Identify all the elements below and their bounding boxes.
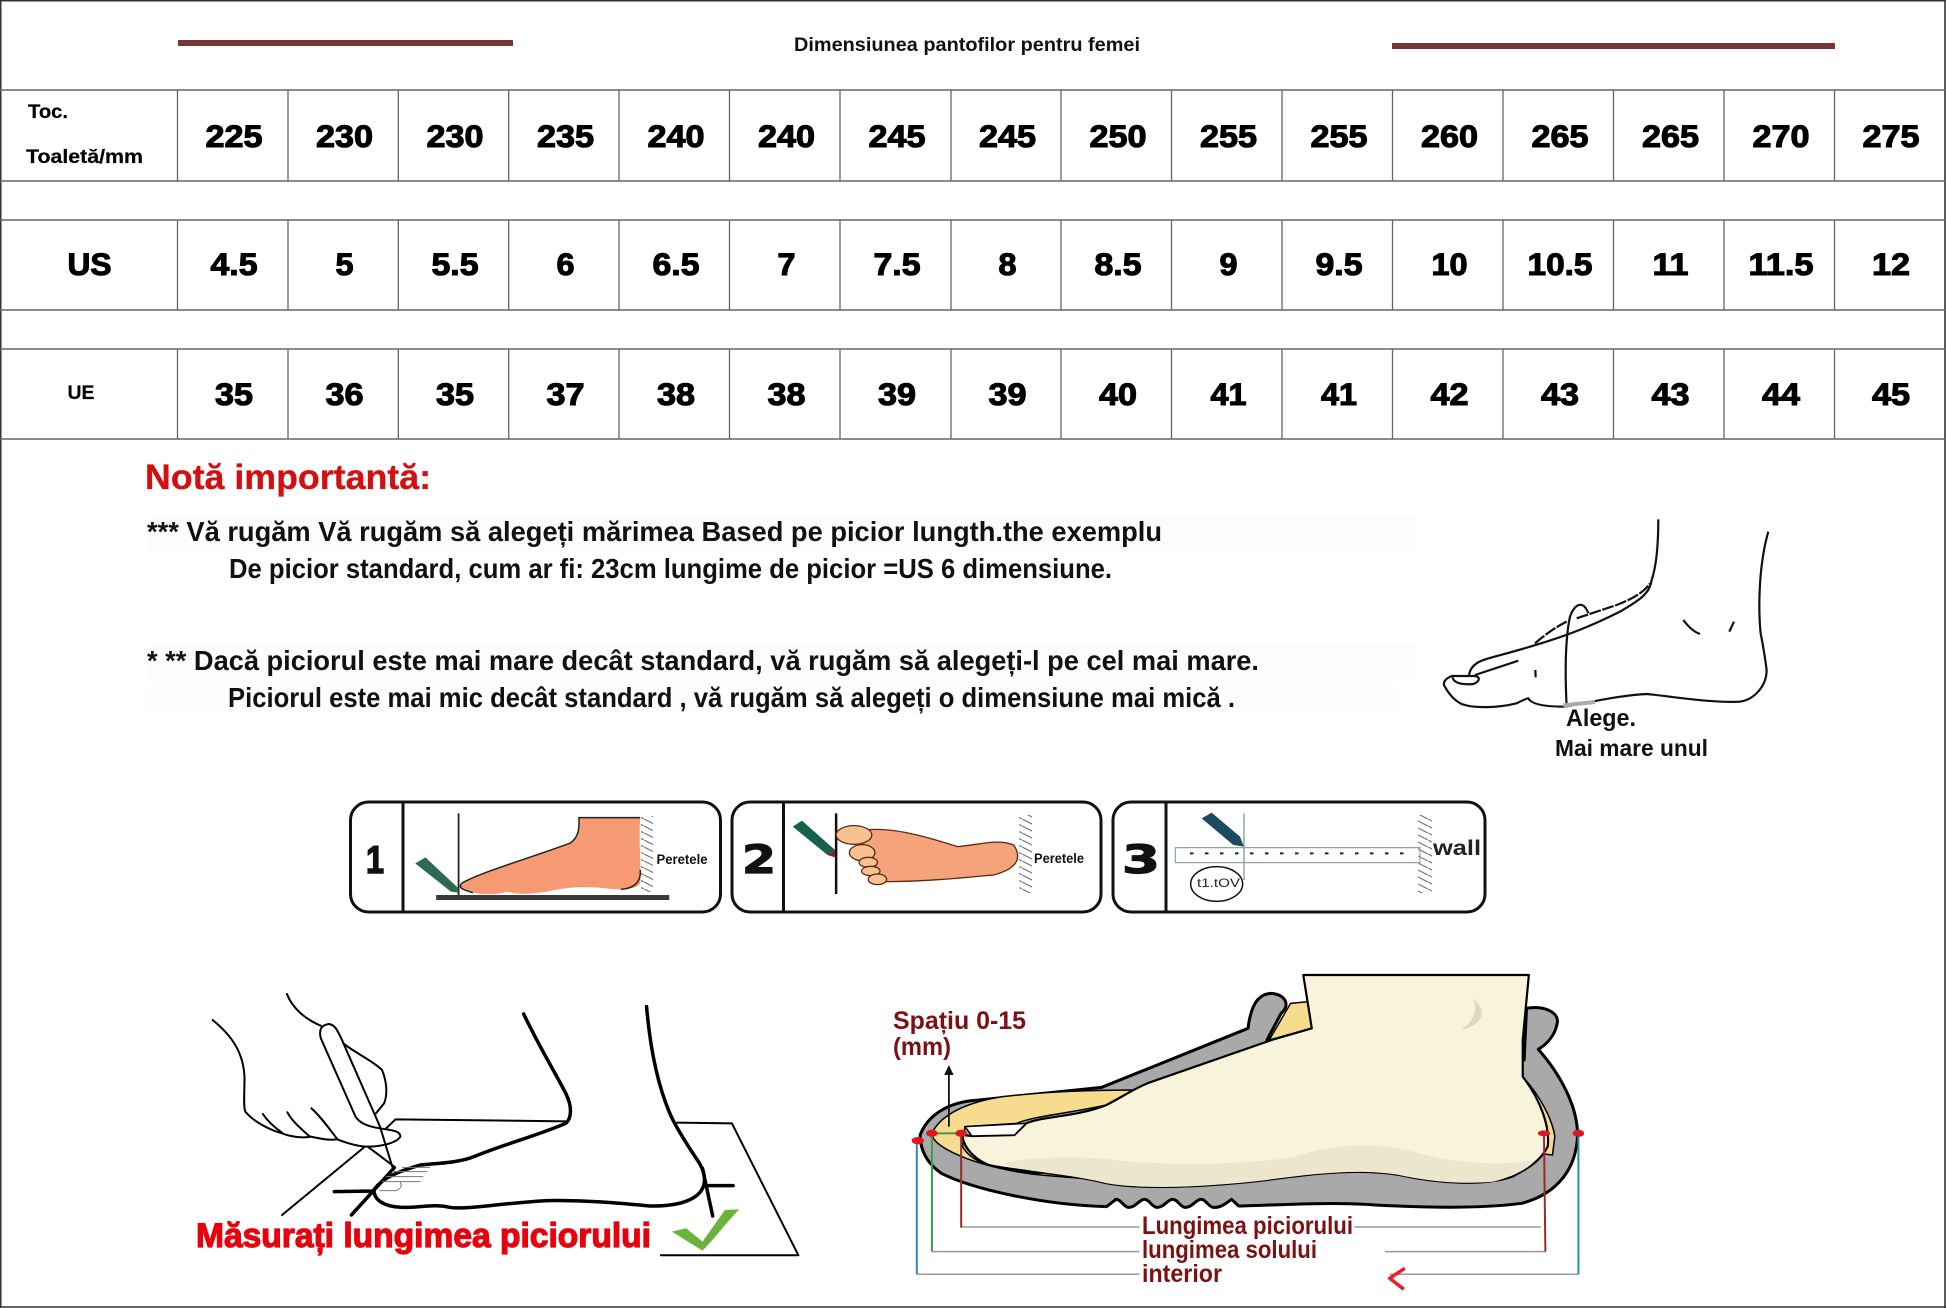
row: foot length in mm: 275 <box>1862 118 1920 154</box>
step 1 panel: 1 <box>366 839 384 882</box>
shoe cross-section diagram: (mm) <box>893 1033 951 1061</box>
title bar <box>178 35 1835 56</box>
row: US sizes: 8 <box>998 246 1016 282</box>
row: US sizes: 9.5 <box>1316 246 1362 282</box>
step 1 panel <box>350 802 720 912</box>
row: EU sizes: 35 <box>436 376 474 412</box>
illustration: measuring foot length with pen <box>196 994 798 1255</box>
row: EU sizes <box>68 376 1910 412</box>
row: US sizes: 5.5 <box>432 246 478 282</box>
row: US sizes <box>68 246 1910 282</box>
row: EU sizes: 38 <box>768 376 806 412</box>
row: US sizes: 7.5 <box>874 246 920 282</box>
row: US sizes: 11 <box>1652 246 1688 282</box>
row: US sizes: 10 <box>1432 246 1468 282</box>
foot side view with pen <box>415 813 669 900</box>
row: US sizes: 8.5 <box>1094 246 1142 282</box>
row: foot length in mm: 260 <box>1421 118 1478 154</box>
step 3 panel <box>1113 802 1485 912</box>
row: foot length in mm: 230 <box>316 118 373 154</box>
row: US sizes: 10.5 <box>1528 246 1592 282</box>
gap label: Spațiu 0-15 <box>893 1007 1026 1035</box>
foot top view with pen <box>793 813 1018 894</box>
row: EU sizes: 41 <box>1321 376 1357 412</box>
row: foot length in mm: 240 <box>758 118 815 154</box>
row: EU sizes: 38 <box>657 376 695 412</box>
row: EU sizes: 40 <box>1099 376 1137 412</box>
row: foot length in mm: 245 <box>979 118 1036 154</box>
row: EU sizes: 37 <box>546 376 584 412</box>
row: EU sizes: 43 <box>1541 376 1579 412</box>
length labels: Lungimea piciorului <box>1142 1212 1353 1240</box>
row: foot length in mm: 255 <box>1310 118 1368 154</box>
row: EU sizes: UE <box>68 383 94 404</box>
row: foot length in mm <box>26 102 1920 168</box>
row: EU sizes: 41 <box>1210 376 1246 412</box>
row: foot length in mm: Toc. <box>28 102 68 123</box>
wall hatch <box>1418 815 1432 893</box>
foot sketch: choose larger size <box>1444 519 1768 761</box>
row: EU sizes: 42 <box>1430 376 1468 412</box>
row: US sizes: 6 <box>556 246 574 282</box>
row: US sizes: 6.5 <box>652 246 700 282</box>
row: US sizes: 4.5 <box>210 246 258 282</box>
row: foot length in mm: 225 <box>206 118 262 154</box>
row: foot length in mm: 270 <box>1752 118 1810 154</box>
row: foot length in mm: 250 <box>1090 118 1146 154</box>
row: foot length in mm: Toaletă/mm <box>26 147 143 168</box>
row: foot length in mm: 265 <box>1642 118 1699 154</box>
title: Dimensiunea pantofilor pentru femei <box>794 35 1140 56</box>
yellow insole <box>932 1090 1135 1180</box>
wall hatch <box>1019 815 1032 893</box>
row: US sizes: US <box>68 246 112 282</box>
shoe cross-section diagram: interior <box>1142 1260 1222 1288</box>
row: foot length in mm: 255 <box>1200 118 1257 154</box>
row: US sizes: 12 <box>1872 246 1910 282</box>
green check mark <box>672 1209 739 1251</box>
row: foot length in mm: 265 <box>1532 118 1588 154</box>
row: EU sizes: 35 <box>215 376 253 412</box>
measurement lines <box>917 1227 1578 1274</box>
clearance arrow <box>948 1073 950 1127</box>
wall hatch <box>641 816 653 892</box>
step 3 panel: 3 <box>1122 838 1160 883</box>
row: EU sizes: 44 <box>1762 376 1801 412</box>
note heading: Notă importantă: <box>145 458 431 497</box>
step 2 panel: 2 <box>742 838 776 883</box>
row: EU sizes: 36 <box>326 376 364 412</box>
important note text block: De picior standard, cum ar fi: 23cm lungime de picior =US 6 dimensiune. <box>229 553 1112 584</box>
row: US sizes: 9 <box>1220 246 1238 282</box>
important note text block: * ** Dacă piciorul este mai mare decât standard, vă rugăm să alegeți-l pe cel mai mare. <box>147 645 1259 676</box>
row: US sizes: 7 <box>778 246 796 282</box>
row: foot length in mm: 240 <box>648 118 704 154</box>
shoe cross-section diagram <box>893 975 1584 1289</box>
shoe cross-section diagram: lungimea solului <box>1142 1236 1317 1264</box>
important note text block <box>145 458 1415 717</box>
row: US sizes: 5 <box>336 246 354 282</box>
row: foot length in mm: 235 <box>537 118 594 154</box>
foot sketch: choose larger size: Alege. <box>1566 705 1636 732</box>
ruler and pen <box>1175 813 1420 901</box>
caption: Măsurați lungimea piciorului <box>196 1217 651 1255</box>
row: EU sizes: 43 <box>1652 376 1690 412</box>
step 1 panel: Peretele <box>656 852 708 867</box>
foot sketch: choose larger size: Mai mare unul <box>1555 735 1708 761</box>
row: US sizes: 11.5 <box>1748 246 1814 282</box>
step 2 panel <box>732 802 1101 912</box>
step 2 panel: Peretele <box>1034 851 1084 866</box>
row: EU sizes: 39 <box>878 376 916 412</box>
foot shape <box>963 975 1548 1187</box>
important note text block: Piciorul este mai mic decât standard , vă rugăm să alegeți o dimensiune mai mică . <box>228 682 1235 713</box>
row: EU sizes: 45 <box>1872 376 1910 412</box>
step 3 panel: wall <box>1432 837 1481 860</box>
step 3 panel: t1.tOV <box>1197 876 1240 890</box>
row: foot length in mm: 245 <box>868 118 926 154</box>
grey sole and upper <box>920 993 1578 1207</box>
row: EU sizes: 39 <box>988 376 1026 412</box>
important note text block: *** Vă rugăm Vă rugăm să alegeți mărimea Based pe picior lungth.the exemplu <box>147 516 1162 547</box>
row: foot length in mm: 230 <box>426 118 484 154</box>
